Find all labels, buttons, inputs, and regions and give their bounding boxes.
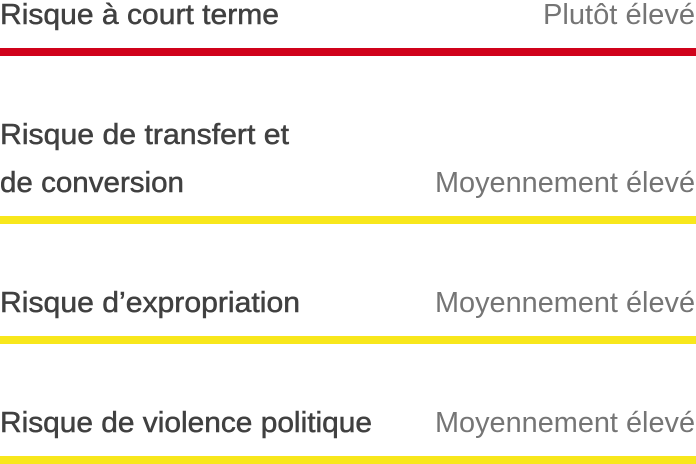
bar: yellow [0, 336, 696, 344]
row: political violence risk [0, 407, 696, 464]
bar: red [0, 48, 696, 56]
rating: transfer and conversion risk: Moyennement élevé [435, 167, 695, 199]
rating: expropriation risk: Moyennement élevé [435, 287, 695, 319]
rating: political violence risk: Moyennement élevé [435, 407, 695, 439]
label: transfer and conversion risk [0, 119, 289, 199]
bar: yellow [0, 216, 696, 224]
label: expropriation risk: Risque d’expropriation [0, 287, 300, 319]
bar: yellow [0, 456, 696, 464]
row: expropriation risk [0, 287, 696, 344]
label: transfer and conversion risk: Risque de transfert et [0, 119, 289, 151]
label: political violence risk: Risque de violence politique [0, 407, 372, 439]
row: short-term risk [0, 0, 696, 56]
label: transfer and conversion risk: de conversion [0, 167, 184, 199]
row: transfer and conversion risk [0, 119, 696, 224]
